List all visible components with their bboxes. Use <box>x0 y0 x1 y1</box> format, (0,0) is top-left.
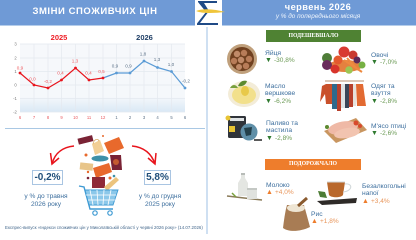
header band right <box>222 0 416 26</box>
icon: fuel and lubricants <box>226 116 262 140</box>
line chart: 5 <box>170 115 173 120</box>
icon: butter <box>228 81 260 107</box>
item: soft drinks: +3,4% <box>371 198 390 205</box>
caption: year: у % до грудня <box>139 193 181 200</box>
item: fuel: мастила <box>266 127 292 134</box>
line chart: 10 <box>73 115 78 120</box>
line chart: 0,0 <box>29 76 36 82</box>
line chart: 0,9 <box>112 64 119 68</box>
item: milk: ▲ <box>266 189 273 196</box>
item: poultry: -2,6% <box>380 130 397 137</box>
title: ЗМІНИ СПОЖИВЧИХ ЦІН <box>32 6 158 17</box>
line chart: 1 <box>14 69 17 74</box>
item: clothes: взуття <box>371 90 391 97</box>
line chart: 11 <box>87 115 92 120</box>
item: fuel: ▼ <box>266 135 273 142</box>
item: milk: +4,0% <box>275 189 294 196</box>
item: clothes: ▼ <box>371 98 378 105</box>
item: milk: Молоко <box>266 182 290 189</box>
icon: poultry <box>324 118 367 143</box>
banner: more expensive: ПОДОРОЖЧАЛО <box>289 161 337 167</box>
line chart: 7 <box>33 115 36 120</box>
line chart: 1,3 <box>72 58 79 64</box>
item: poultry: ▼ <box>371 130 378 137</box>
item: eggs <box>265 50 295 64</box>
line chart: 0,9 <box>125 64 132 68</box>
item: vegetables: -7,0% <box>380 59 397 66</box>
icon: milk <box>227 173 262 200</box>
banner: cheaper <box>266 30 361 42</box>
line chart: -0,2 <box>44 79 52 84</box>
item: rice: ▲ <box>311 218 318 225</box>
line chart: 1,8 <box>140 52 147 56</box>
period subheading: у % до попереднього місяця <box>276 13 360 20</box>
year 2025: 2025 <box>51 33 67 42</box>
item: eggs: ▼ <box>265 57 272 64</box>
caption: month: у % до травня <box>24 193 68 200</box>
item: eggs: Яйця <box>265 50 281 57</box>
horizontal divider <box>5 128 205 129</box>
banner: more expensive <box>265 159 361 170</box>
line chart: -1 <box>13 96 18 101</box>
banner: cheaper: ПОДЕШЕВШАЛО <box>288 33 339 39</box>
item: soft drinks <box>362 183 406 205</box>
icon: clothes rack <box>320 81 366 111</box>
line chart: 2 <box>14 56 17 60</box>
item: clothes: Одяг та <box>371 83 395 90</box>
item: rice <box>311 211 339 225</box>
line chart: 0,5 <box>98 69 105 74</box>
item: soft drinks: напої <box>362 190 379 197</box>
item: butter: вершкове <box>265 90 295 97</box>
box: year change <box>144 170 171 185</box>
line chart: 1,3 <box>154 57 161 62</box>
line chart: 6 <box>184 115 187 120</box>
item: rice: +1,8% <box>320 218 339 225</box>
line chart: 4 <box>156 115 159 120</box>
vertical divider <box>206 27 208 234</box>
item: poultry: М'ясо птиці <box>371 123 406 130</box>
icon: tea <box>317 182 357 205</box>
line chart: 2 <box>129 115 132 120</box>
box: year change: 5,8% <box>146 172 169 183</box>
item: butter: ▼ <box>265 98 272 105</box>
box: month change: -0,2% <box>34 172 61 183</box>
item: milk <box>266 182 294 196</box>
item: butter: -6,2% <box>274 98 291 105</box>
line chart: 0,9 <box>17 66 24 70</box>
item: eggs: -30,8% <box>274 57 295 64</box>
item: vegetables: ▼ <box>371 59 378 66</box>
item: fuel: -2,8% <box>275 135 292 142</box>
year 2026: 2026 <box>136 33 153 42</box>
line chart: 12 <box>101 115 106 120</box>
line chart: 0,4 <box>85 70 92 76</box>
line chart: 3 <box>143 115 146 120</box>
icon: eggs <box>227 44 257 74</box>
item: fuel: Паливо та <box>266 120 298 127</box>
icon: rice <box>283 198 310 231</box>
box: month change <box>32 170 63 185</box>
period heading: червень 2026 <box>285 2 351 12</box>
item: fuel <box>266 120 298 142</box>
item: vegetables <box>371 52 397 66</box>
line chart: 8 <box>47 115 50 120</box>
icon: vegetables <box>322 46 366 74</box>
header band left <box>0 0 195 26</box>
line chart: 6 <box>19 115 22 120</box>
caption: month <box>24 193 68 208</box>
line chart: -2 <box>13 110 18 114</box>
item: vegetables: Овочі <box>371 52 388 59</box>
item: clothes <box>371 83 397 105</box>
item: poultry <box>371 123 406 137</box>
item: butter <box>265 83 295 105</box>
line chart: 0 <box>14 82 17 88</box>
line chart: -0,2 <box>182 78 190 84</box>
caption: year <box>138 193 181 208</box>
line chart: 1,0 <box>168 62 175 67</box>
item: soft drinks: Безалкогольні <box>362 183 406 190</box>
line chart: 0,4 <box>57 70 64 76</box>
item: rice: Рис <box>311 211 323 218</box>
item: clothes: -2,8% <box>380 98 397 105</box>
line chart: 9 <box>60 115 63 120</box>
footer source note: Експрес-випуск «Індекси споживчих цін у Миколаївській області у червні 2026 року» (14.07.2026) <box>5 225 203 230</box>
caption: month: 2026 року <box>31 200 61 208</box>
line chart: 1 <box>115 115 118 120</box>
caption: year: 2025 року <box>145 200 175 208</box>
icon: logo <box>196 1 225 25</box>
line chart: 3 <box>14 42 17 46</box>
item: soft drinks: ▲ <box>362 198 369 205</box>
item: butter: Масло <box>265 83 285 90</box>
